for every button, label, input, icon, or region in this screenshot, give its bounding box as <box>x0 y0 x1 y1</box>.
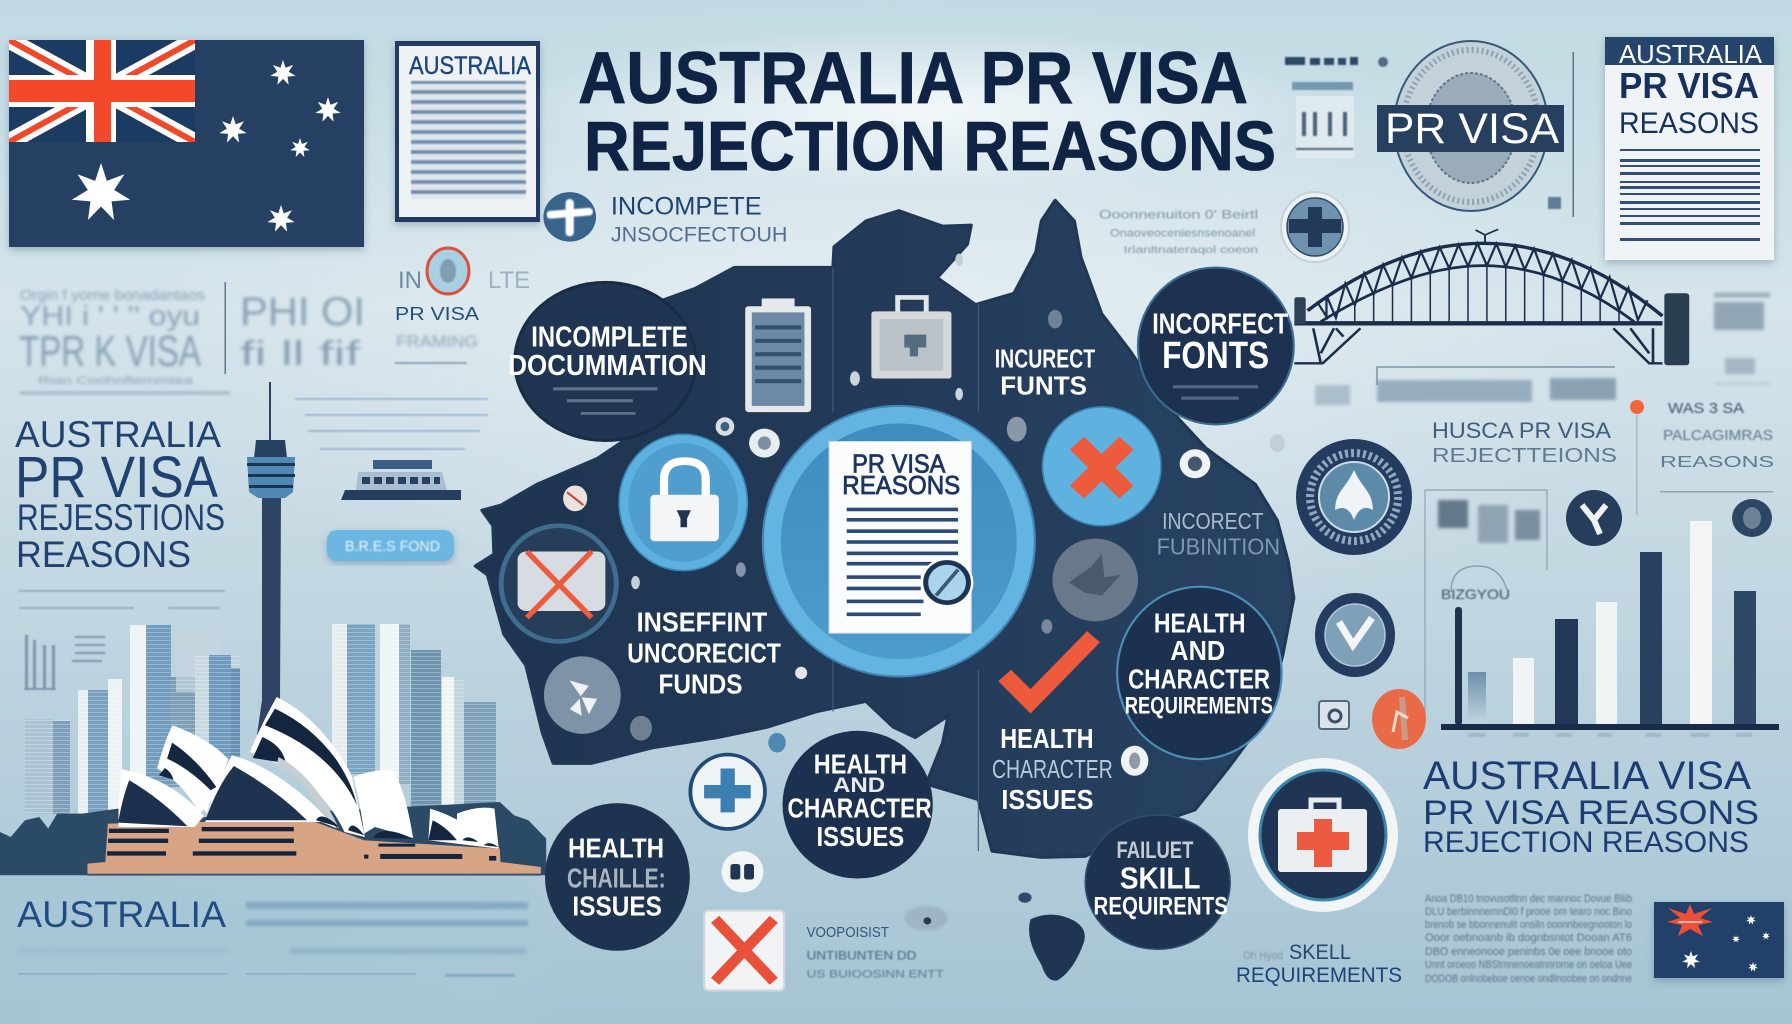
incomplete label with red ring: LTE <box>488 267 530 294</box>
faded block right <box>1714 293 1770 385</box>
top label icon <box>543 192 596 242</box>
PR VISA small label: PR VISA <box>395 304 479 324</box>
faded mid-right labels <box>1432 400 1774 492</box>
faded figures <box>24 635 105 690</box>
small body text: Unnt oroeoo NBStrnnenoeatnnrorne on oeloa Uee <box>1425 959 1632 971</box>
small body text: DBO enneonooe peninbs 0e oee bnooe oto <box>1425 946 1632 958</box>
trees <box>0 802 546 875</box>
lower supports <box>1294 328 1662 363</box>
document: Australia <box>395 41 540 222</box>
skill requirements label: SKELL <box>1289 941 1351 964</box>
bottom left Australia label: AUSTRALIA <box>17 894 226 935</box>
faded mid-right labels: REJECTTEIONS <box>1432 445 1617 467</box>
Sydney Harbour Bridge <box>1294 229 1689 365</box>
faded mid-right labels: REASONS <box>1660 454 1774 471</box>
pylons <box>1294 297 1306 324</box>
faded top right text: Onaoveoceniesnsenoanel <box>1110 227 1255 239</box>
PR VISA band: PR VISA <box>1385 105 1559 153</box>
faded mid-right labels: WAS 3 SA <box>1668 400 1744 417</box>
icon: red cross box <box>704 911 784 991</box>
label: insufficient funds: INSEFFINT <box>637 607 768 638</box>
bottom right heading: REJECTION REASONS <box>1423 826 1749 859</box>
podium <box>87 820 541 876</box>
bottom right heading: PR VISA REASONS <box>1423 794 1759 832</box>
badge: health and character requirements <box>1117 587 1282 759</box>
left heading <box>15 414 225 575</box>
label: health character issues: CHARACTER <box>992 755 1113 784</box>
icon: briefcase <box>871 297 951 379</box>
label: incorrect fuzzy: INCORECT <box>1162 508 1264 534</box>
badge: health challenge issues: ISSUES <box>572 891 662 922</box>
faded lines <box>295 398 488 450</box>
badge: health and character issues <box>783 731 933 878</box>
deck <box>1294 317 1662 330</box>
top label text: JNSOCFECTOUH <box>611 222 787 246</box>
badge: health and character issues: HEALTH <box>814 749 907 780</box>
faded text block left: Orgin f yorne bonadantaos <box>20 287 205 304</box>
label: insufficient funds: UNCORECICT <box>627 638 781 669</box>
Tasmania <box>1029 915 1085 981</box>
document: Australia PR visa reasons <box>1605 37 1774 260</box>
arch truss <box>1308 243 1662 316</box>
icon: stamp <box>921 558 973 607</box>
union jack <box>9 40 195 142</box>
seal side line <box>1548 52 1574 217</box>
icon: check badge <box>1315 593 1395 677</box>
icon: plus circle <box>690 755 765 829</box>
faded text block left: fi ll fif <box>240 335 361 373</box>
badge: health challenge issues: CHAILLE: <box>567 863 666 894</box>
badge: failed skill requirements: SKILL <box>1120 860 1200 895</box>
icon: medical kit <box>1248 758 1398 912</box>
icon: dark blob <box>1732 499 1772 537</box>
left heading: PR VISA <box>15 445 218 510</box>
small body text: DODOB onlnobeboe oenoe ondlinoobee on ondnne <box>1425 973 1632 985</box>
icon: white pill <box>722 851 763 892</box>
faded mid-right labels: PALCAGIMRAS <box>1663 427 1773 444</box>
badge: health and character requirements: REQUIREMENTS <box>1125 693 1273 720</box>
skill requirements label: Oh Hyod <box>1243 950 1283 962</box>
icon: grey fan circle <box>544 656 621 734</box>
badge: health and character requirements: AND <box>1170 636 1225 667</box>
icon: file document <box>745 298 811 412</box>
small body text: Ooor oebnoanb ib dognbsntot Dooan AT6 <box>1425 932 1632 944</box>
map of Australia <box>475 200 1294 857</box>
icon: plus badge top <box>1281 192 1349 262</box>
chart caption <box>1441 566 1510 602</box>
label: health character issues: HEALTH <box>1000 724 1094 755</box>
Australian flag <box>9 40 364 247</box>
document: Australia PR visa reasons: AUSTRALIA <box>1619 39 1763 69</box>
label: health character issues: ISSUES <box>1001 785 1094 816</box>
small shells right <box>316 808 499 849</box>
big centre circle <box>763 406 1035 677</box>
flag top <box>1476 229 1498 243</box>
icon: crossed envelope <box>501 526 616 641</box>
label: incorrect fuzzy <box>1157 508 1280 559</box>
orange dot with leader <box>1630 400 1644 515</box>
PR VISA small label <box>395 304 479 364</box>
small body text: brenob se bbonnenulit onsiln ooonnbeegnooton lo <box>1425 919 1632 931</box>
label: insufficient funds <box>627 607 781 700</box>
badge: health and character requirements: HEALTH <box>1154 608 1245 639</box>
badge: incomplete documentation <box>508 282 707 441</box>
faded icons upper right <box>1285 57 1388 158</box>
label: health character issues <box>992 724 1113 816</box>
blue button: B.R.E.S FOND <box>345 538 440 555</box>
icon: orange circle <box>1372 689 1426 749</box>
buildings right <box>332 624 496 812</box>
faded top right text <box>1099 207 1258 256</box>
state seams <box>833 267 978 851</box>
incomplete label with red ring <box>398 248 530 294</box>
badge: health and character issues: CHARACTER <box>787 793 932 824</box>
label: insufficient funds: FUNDS <box>659 669 742 700</box>
badge: incorrect fonts: INCORFECT <box>1152 308 1288 340</box>
shell left <box>118 769 204 827</box>
label: incorrect funds: FUNTS <box>1000 371 1087 400</box>
badge: incorrect fonts <box>1138 267 1294 424</box>
badge: failed skill requirements: REQUIRENTS <box>1094 893 1228 920</box>
badge: incomplete documentation: INCOMPLETE <box>531 321 688 353</box>
faded mid-right labels: HUSCA PR VISA <box>1432 418 1611 443</box>
label: incorrect funds: INCURECT <box>995 344 1095 373</box>
faded top right text: Ooonnenuiton 0' Beirtl <box>1099 207 1258 221</box>
skill requirements label: REQUIREMENTS <box>1236 964 1402 987</box>
faded voucher text: US BUIOOSINN ENTT <box>807 968 944 981</box>
faded text block left: Rian Coohoftemmtea <box>38 375 194 387</box>
divider line <box>224 282 226 374</box>
chart caption: BIZGYOU <box>1441 586 1510 602</box>
icon: grey circle <box>1052 539 1138 621</box>
bar chart <box>1441 521 1779 737</box>
shell back left <box>157 725 228 814</box>
faded text block left: PHI OI <box>240 290 365 334</box>
flag stars <box>72 60 341 232</box>
top label text: INCOMPETE <box>611 193 762 220</box>
document: Australia PR visa reasons: REASONS <box>1619 107 1759 140</box>
Sydney Opera House <box>0 697 546 876</box>
left heading: AUSTRALIA <box>15 414 221 455</box>
faded panel below bridge <box>1315 367 1616 405</box>
PR VISA small label: FRAMING <box>396 332 478 351</box>
small flag <box>1654 902 1784 978</box>
document: PR visa reasons: REASONS <box>842 471 960 500</box>
icon: check mark <box>1005 637 1094 701</box>
faded photo box <box>1425 490 1547 712</box>
icon: red cross circle <box>1043 407 1161 526</box>
badge: health and character issues: AND <box>833 773 885 797</box>
shell rear white <box>353 770 413 838</box>
badge: failed skill requirements: FAILUET <box>1117 837 1193 864</box>
incomplete label with red ring: IN <box>398 267 422 294</box>
faded voucher text: UNTIBUNTEN DD <box>807 948 916 962</box>
skyline <box>24 624 496 815</box>
icon: small tile <box>1319 701 1349 729</box>
badge: health challenge issues: HEALTH <box>568 833 664 864</box>
skill requirements label <box>1236 941 1402 987</box>
faded text block left: TPR K VISA <box>19 327 201 376</box>
seal with PR VISA band <box>1377 41 1564 211</box>
bottom right heading: AUSTRALIA VISA <box>1423 754 1751 798</box>
icon: dark Y circle <box>1566 490 1622 546</box>
left heading: REJESSTIONS <box>17 497 225 538</box>
seal badge <box>1296 439 1412 555</box>
boat <box>341 460 461 500</box>
document: Australia PR visa reasons: PR VISA <box>1619 65 1759 106</box>
main title <box>525 30 1325 190</box>
small body text: Anoa DB10 tnovusotltnn dec mannoc Dovue Bliib <box>1425 893 1632 905</box>
icon: padlock <box>619 434 747 571</box>
bottom right heading <box>1423 754 1759 859</box>
podium stripes <box>107 827 496 861</box>
label: incorrect funds <box>995 344 1095 400</box>
main title: REJECTION REASONS <box>584 107 1276 185</box>
buildings left <box>25 625 240 815</box>
label: incorrect fuzzy: FUBINITION <box>1157 534 1280 559</box>
badge: incomplete documentation: DOCUMMATION <box>508 350 707 382</box>
faded voucher text <box>807 906 948 981</box>
left heading: REASONS <box>16 534 191 575</box>
shell tall <box>250 697 365 837</box>
central map and badges <box>475 192 1294 991</box>
top label text <box>611 193 787 246</box>
shell centre <box>205 755 337 829</box>
faded voucher text: VOOPOISIST <box>807 925 889 941</box>
badge: health challenge issues <box>545 803 690 951</box>
small body text <box>1425 893 1632 985</box>
document: PR visa reasons <box>829 442 973 633</box>
small decorative dots <box>563 254 1285 903</box>
badge: health and character requirements: CHARACTER <box>1128 664 1270 695</box>
faded top right text: Irlanltnateraqol coeon <box>1124 244 1258 256</box>
faded text block left: YHI i ' ' '' oyu <box>20 300 200 331</box>
badge: failed skill requirements <box>1085 815 1230 949</box>
faded text block left <box>19 287 365 394</box>
main title: AUSTRALIA PR VISA <box>578 38 1248 119</box>
Sydney tower <box>247 382 295 735</box>
document: Australia: AUSTRALIA <box>409 52 531 80</box>
small body text: DLU berbinnnemnDl0 f prooe om tearo noc Bino <box>1425 906 1632 918</box>
document: PR visa reasons: PR VISA <box>852 449 946 478</box>
faded lines under heading <box>19 590 225 609</box>
badge: incorrect fonts: FONTS <box>1162 334 1269 377</box>
badge: health and character issues: ISSUES <box>817 822 904 853</box>
blue button <box>327 530 454 561</box>
bottom left faded lines <box>18 902 528 977</box>
